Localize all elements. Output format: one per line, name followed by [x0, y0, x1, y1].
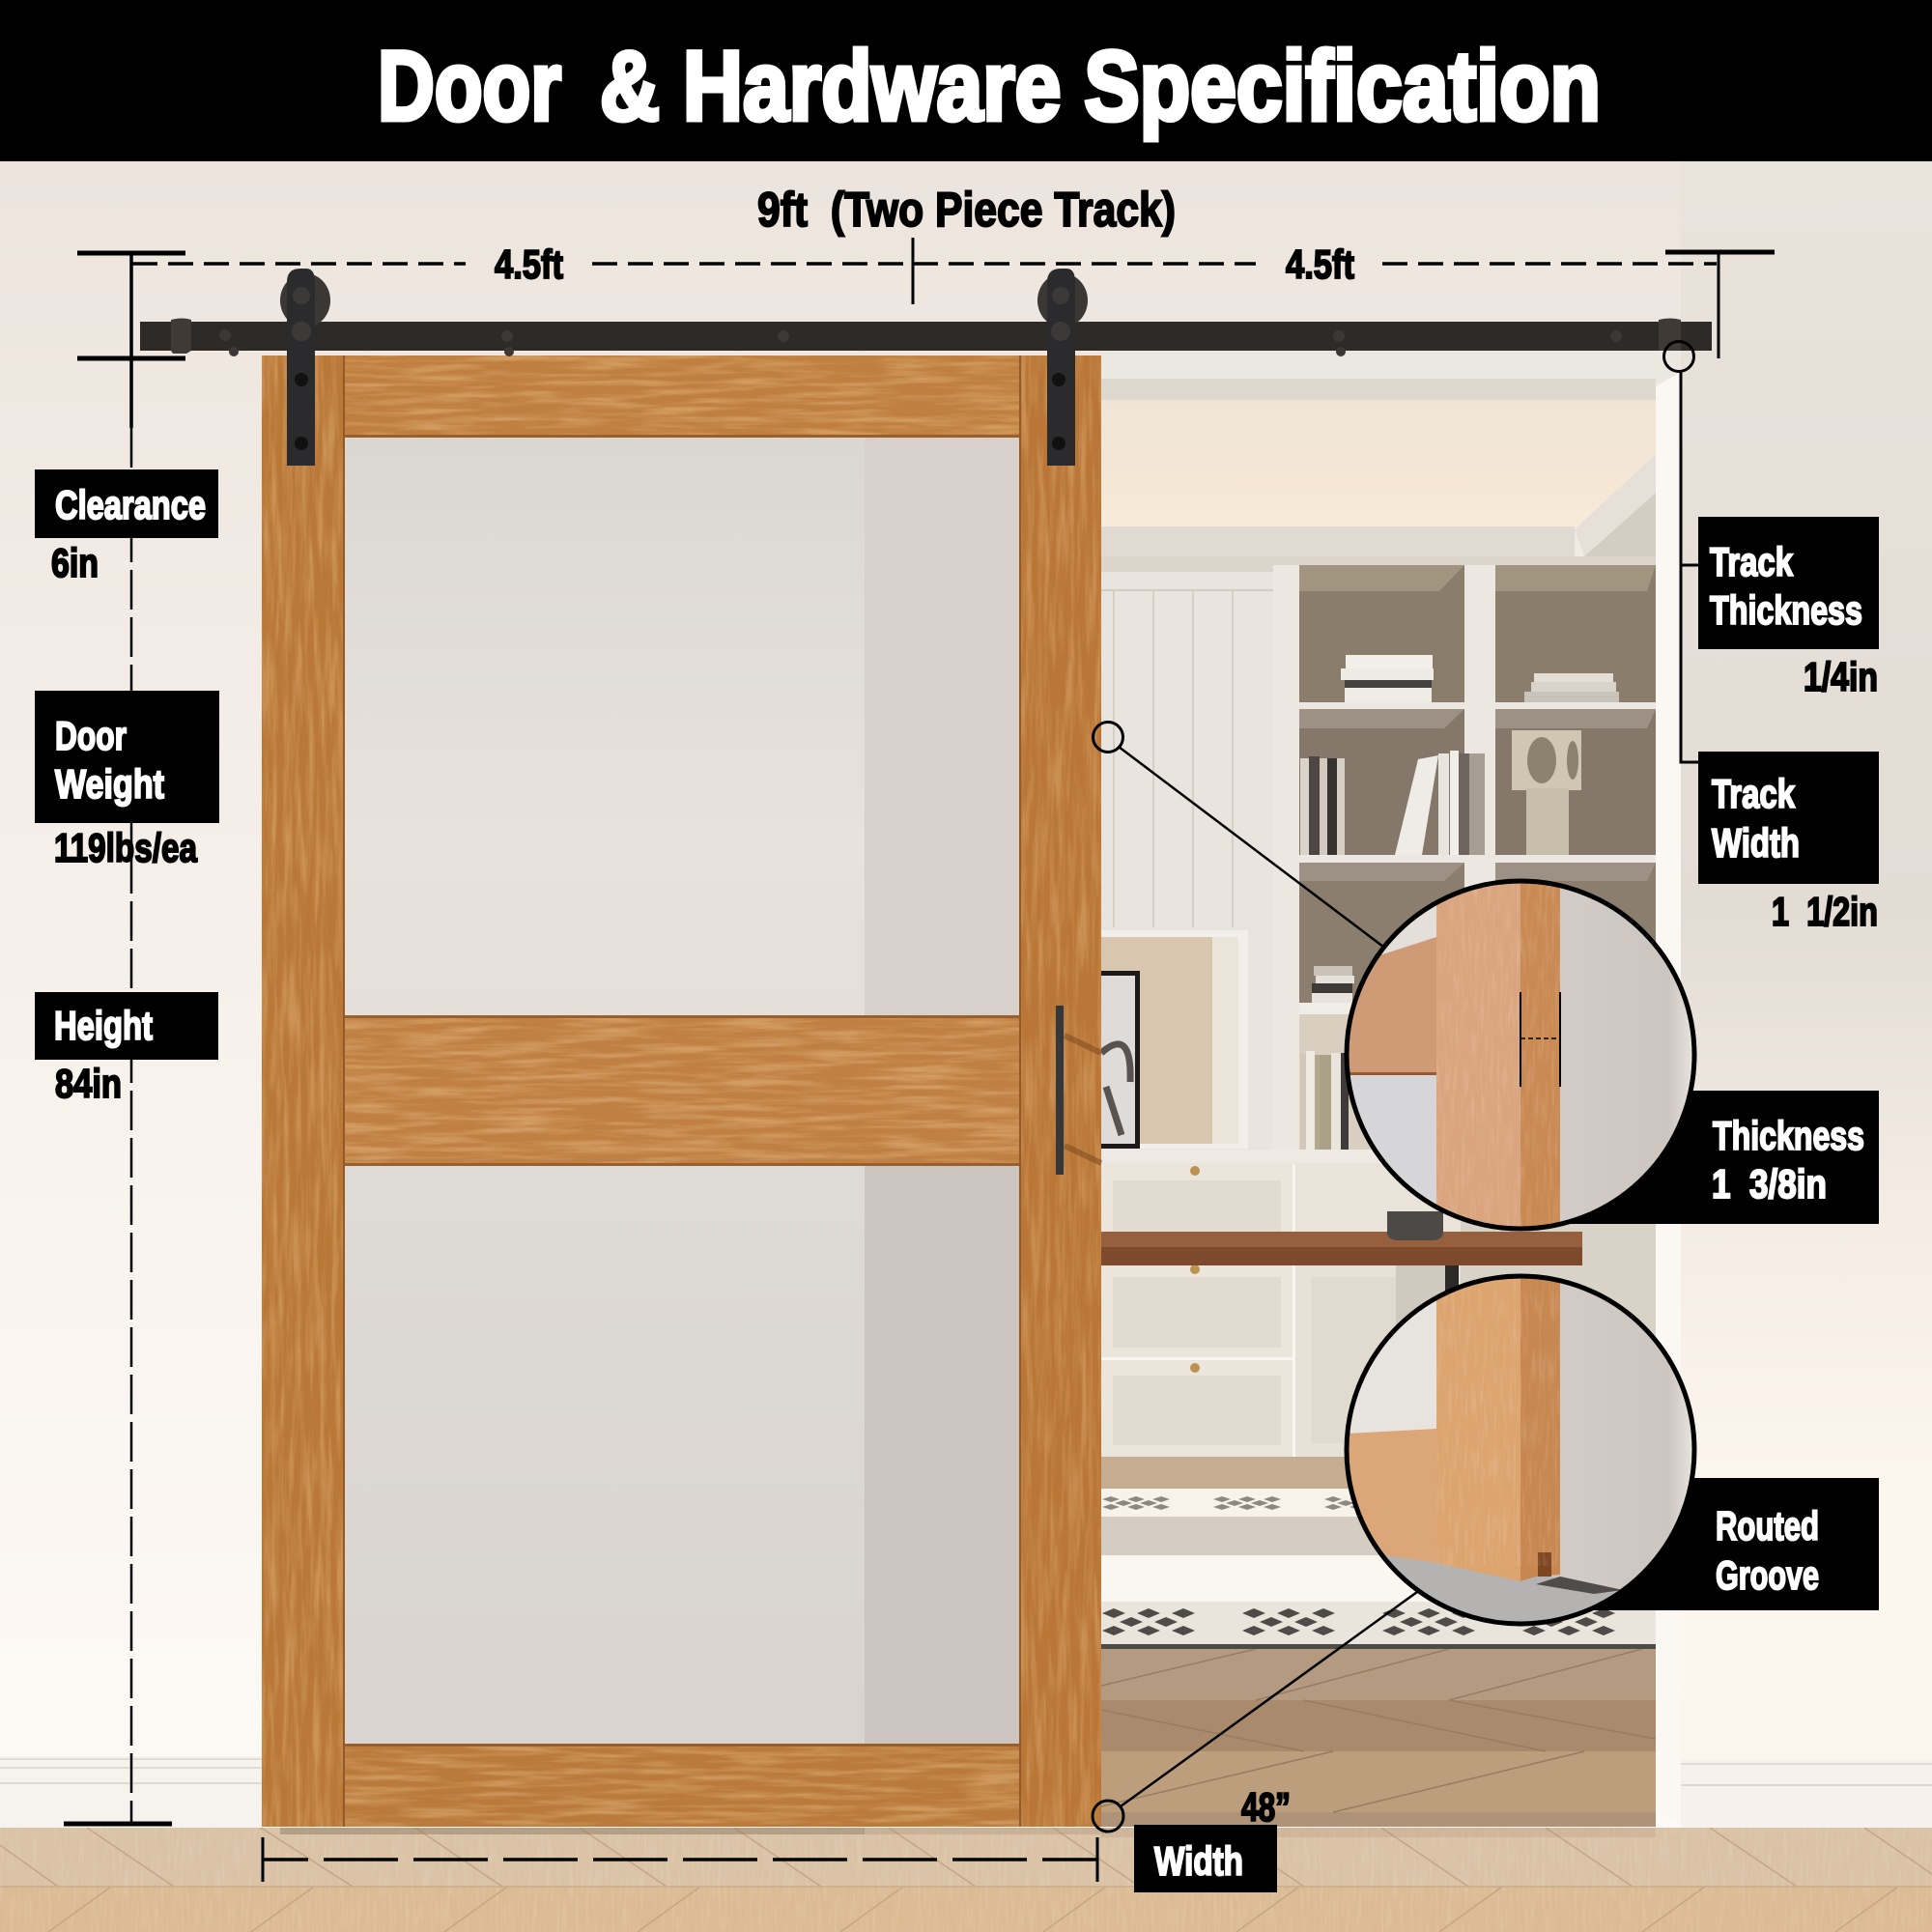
detail circle: door thickness: [1347, 881, 1695, 1230]
width dimension line: [263, 1837, 1097, 1882]
books row two left: [1300, 756, 1345, 855]
header bar with title: & Hardware Specification: [600, 31, 1601, 141]
hanger right: [1037, 269, 1088, 466]
label: height: 84in: [55, 1061, 122, 1106]
header bar with title: [0, 0, 1932, 161]
marker ring: track end: [1663, 342, 1694, 371]
callout box: thickness: Thickness: [1713, 1113, 1864, 1158]
label: track thickness: [1698, 517, 1879, 699]
label: track width: [1698, 752, 1879, 934]
label: clearance: [35, 469, 218, 585]
track callout connector: [1681, 372, 1698, 762]
books row four: [1300, 1051, 1349, 1150]
dimension: track lengths: 4.5ft: [1286, 242, 1354, 287]
glass panel: upper: [344, 438, 1020, 1015]
header bar with title: Door: [378, 31, 561, 141]
label: door weight: [35, 691, 219, 870]
track end stop right: [1659, 319, 1681, 351]
left stile: [262, 355, 344, 1827]
bookshelf: [1273, 565, 1656, 1164]
callout box: thickness: 1 3/8in: [1712, 1161, 1827, 1207]
door handle: [1056, 1006, 1101, 1175]
book stack top left: [1341, 655, 1434, 702]
back wall beside cabinets: [1461, 1163, 1656, 1457]
book stack top right: [1524, 673, 1619, 702]
leader line to thickness detail: [1119, 747, 1383, 947]
track end stop left: [171, 319, 191, 354]
label: width: 48”: [1241, 1784, 1291, 1830]
height dimension line: [64, 253, 185, 1824]
label: track width: Width: [1712, 820, 1800, 866]
cabinets: [1101, 1150, 1584, 1457]
right stile: [1020, 355, 1101, 1827]
bottom rail: [344, 1744, 1020, 1827]
left baseboard: [0, 1756, 262, 1828]
door: [262, 355, 1101, 1827]
dimension: track lengths: 4.5ft: [495, 242, 563, 287]
hanger left: [280, 269, 330, 466]
leader line to groove detail: [1121, 1592, 1417, 1806]
wall panelling: [1101, 572, 1275, 1171]
callout box: routed groove: [1546, 1478, 1879, 1610]
dimension: total track heading: 9ft (Two Piece Track): [757, 183, 1176, 237]
callout box: routed groove: Groove: [1716, 1552, 1819, 1598]
label: door weight: Door: [55, 713, 127, 758]
top rail: [344, 355, 1020, 438]
wall return beside doorway: [1656, 372, 1681, 1826]
books row two right: [1395, 751, 1485, 855]
label: track width: 1 1/2in: [1772, 889, 1878, 934]
label: clearance: Clearance: [55, 482, 206, 527]
label: height: Height: [54, 1003, 153, 1048]
book stack row three: [1312, 966, 1354, 1003]
sculpture: [1512, 730, 1581, 855]
room interior seen through doorway: [1101, 350, 1681, 1827]
label: width: [1134, 1784, 1291, 1892]
label: track thickness: Thickness: [1710, 587, 1862, 633]
label: height: [35, 992, 218, 1106]
framed art: [1101, 930, 1248, 1149]
marker ring: door edge: [1094, 723, 1122, 752]
track bolts: [219, 329, 1622, 356]
label: width: Width: [1154, 1838, 1243, 1884]
label: track width: Track: [1712, 771, 1795, 816]
label: door weight: Weight: [55, 761, 164, 807]
label: track thickness: 1/4in: [1804, 654, 1878, 699]
dimension: track lengths: [132, 238, 1717, 304]
label: door weight: 119lbs/ea: [54, 825, 198, 870]
callout box: routed groove: Routed: [1716, 1503, 1819, 1548]
label: clearance: 6in: [51, 540, 99, 585]
barn door track: [140, 319, 1712, 356]
label: track thickness: Track: [1710, 539, 1793, 584]
marker ring: door bottom corner: [1093, 1801, 1123, 1832]
right track end bracket: [1665, 252, 1775, 358]
floor: herringbone planks: [0, 1828, 1932, 1932]
glass panel: lower: [344, 1166, 1020, 1744]
middle rail: [344, 1015, 1020, 1166]
thickness ticks: [1520, 992, 1560, 1087]
room floor and rug: [1101, 1457, 1656, 1827]
right baseboard: [1681, 1760, 1932, 1828]
ceiling: [1101, 400, 1656, 526]
desk: [1101, 1232, 1582, 1265]
callout box: thickness: [1546, 1091, 1879, 1224]
soffit: [1101, 350, 1681, 400]
crown molding: [1101, 454, 1656, 572]
detail circle: routed groove: [1333, 1276, 1695, 1642]
mug: [1387, 1211, 1443, 1240]
